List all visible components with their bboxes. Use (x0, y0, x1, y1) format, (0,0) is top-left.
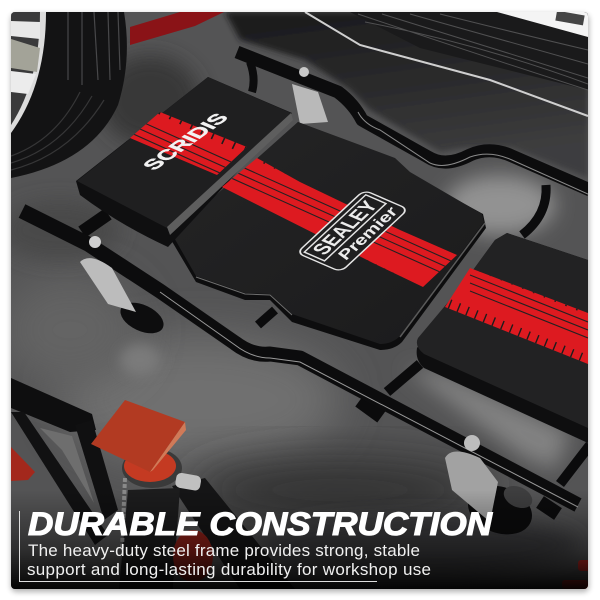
far rail (237, 52, 590, 235)
background jack stand frame (11, 378, 118, 545)
logo: Sealey Premier (297, 190, 408, 272)
seat two (170, 122, 486, 350)
cross bars under seats (82, 214, 590, 514)
text frame (20, 511, 377, 582)
seat one (76, 77, 293, 247)
logo: Sealey Premier: SEALEY (308, 198, 383, 258)
body text: support and long-lasting durability for workshop use (27, 560, 431, 579)
red tool on floor (173, 530, 590, 589)
heading: DURABLE CONSTRUCTION (28, 506, 493, 542)
seat three (417, 233, 588, 443)
bottom gradient (11, 490, 588, 589)
body text: The heavy-duty steel frame provides strong, stable (28, 541, 420, 560)
jack stand saddle (91, 400, 186, 472)
near left caster (80, 236, 164, 334)
body text (27, 541, 431, 579)
logo: Sealey Premier: Premier (333, 204, 404, 262)
near right caster (445, 435, 532, 534)
logo: Scridis: SCRIDIS (138, 111, 234, 173)
tyre and wheel (11, 12, 127, 178)
near rail (22, 211, 578, 507)
red tyre tread stripe (130, 112, 588, 364)
far caster (292, 67, 328, 124)
red car part (130, 12, 224, 45)
axle stand (120, 450, 288, 582)
car body (225, 11, 588, 178)
